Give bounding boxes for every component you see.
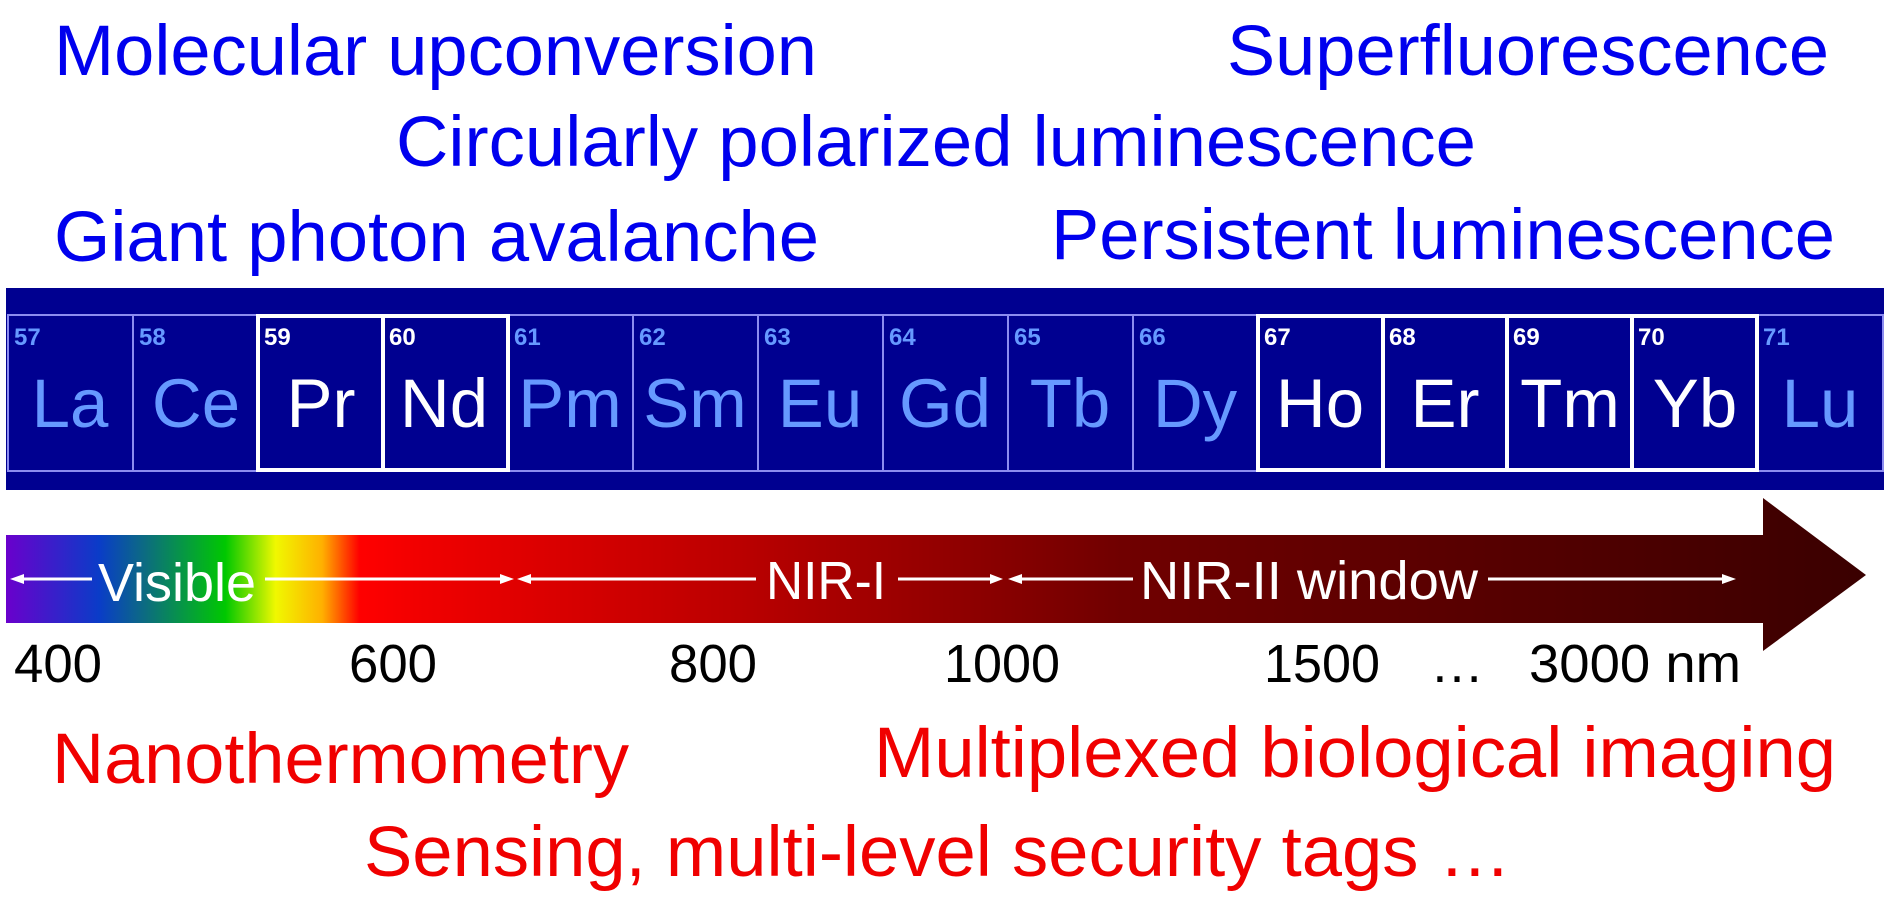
heading: Giant photon avalanche: Giant photon avalanche [54, 198, 819, 277]
element: Nd: 60 [389, 324, 416, 351]
element: Lu: 71 [1763, 324, 1790, 351]
label: Visible: Visible [98, 553, 256, 613]
element: Pr: Pr [286, 365, 356, 442]
tick: 3000 nm: 3000 nm [1529, 634, 1741, 694]
label: NIR-I: NIR-I [766, 551, 886, 611]
element: Yb: Yb [1653, 365, 1737, 442]
element: Tb: Tb [1030, 365, 1110, 442]
axis labels [14, 634, 1741, 694]
element: Er [1389, 324, 1480, 442]
element: Tm: 69 [1513, 324, 1540, 351]
element: Gd: 64 [889, 324, 916, 351]
element: Yb: 70 [1638, 324, 1665, 351]
element: Tm [1513, 324, 1620, 442]
element: Sm: 62 [639, 324, 666, 351]
element: Ho: Ho [1276, 365, 1364, 442]
highlighted cells: Ho, Er, Tm, Yb [1258, 316, 1757, 470]
element: Sm: Sm [643, 365, 747, 442]
element: Yb [1638, 324, 1737, 442]
element: Eu [764, 324, 862, 442]
element: Tm: Tm [1520, 365, 1620, 442]
element: Dy [1139, 324, 1238, 442]
arrow: NIR-II left [1008, 574, 1133, 584]
element: Ho: 67 [1264, 324, 1291, 351]
element: La [14, 324, 109, 442]
tick: 1500: 1500 [1264, 634, 1380, 694]
arrow: visible left [10, 574, 92, 584]
element: Er: 68 [1389, 324, 1416, 351]
element: Lu [1763, 324, 1858, 442]
label: NIR-II window: NIR-II window [1140, 551, 1479, 611]
element: La: La [32, 365, 109, 442]
element: Ce: 58 [139, 324, 166, 351]
element: Pm [514, 324, 622, 442]
element: Eu: 63 [764, 324, 791, 351]
element: Dy: 66 [1139, 324, 1166, 351]
element: Tb [1014, 324, 1110, 442]
element: Gd: Gd [899, 365, 991, 442]
heading: Multiplexed biological imaging: Multiplexed biological imaging [874, 714, 1836, 793]
tick: 600: 600 [349, 634, 437, 694]
arrow: NIR-I left [517, 574, 756, 584]
tick: 400: 400 [14, 634, 102, 694]
element: Pr [264, 324, 356, 442]
element: Pm: Pm [518, 365, 622, 442]
ellipsis: … [1430, 634, 1484, 694]
element: Dy: Dy [1153, 365, 1238, 442]
arrow: NIR-I right [898, 574, 1003, 584]
element: Er: Er [1410, 365, 1480, 442]
element: Nd [389, 324, 488, 442]
element: Sm [639, 324, 747, 442]
element: Ce: Ce [152, 365, 240, 442]
heading: Nanothermometry: Nanothermometry [52, 720, 629, 799]
heading: Persistent luminescence: Persistent luminescence [1051, 196, 1835, 275]
highlighted cells: Pr, Nd [258, 316, 508, 470]
heading: Superfluorescence: Superfluorescence [1227, 12, 1829, 91]
heading: Molecular upconversion: Molecular upconversion [54, 12, 817, 91]
element: Gd [889, 324, 991, 442]
element: Lu: Lu [1782, 365, 1858, 442]
element: Pr: 59 [264, 324, 291, 351]
element: Nd: Nd [400, 365, 488, 442]
range arrows and labels [10, 551, 1736, 613]
heading: Sensing, multi-level security tags: Sensing, multi-level security tags … [364, 813, 1511, 892]
element: Ho [1264, 324, 1364, 442]
element: Eu: Eu [778, 365, 862, 442]
arrow: visible right [265, 574, 514, 584]
tick: 800: 800 [669, 634, 757, 694]
element: Pm: 61 [514, 324, 541, 351]
arrow: wavelength spectrum [6, 498, 1866, 651]
panel: lanthanide periodic table row [6, 288, 1884, 490]
element: Ce [139, 324, 240, 442]
arrow: NIR-II right [1488, 574, 1736, 584]
heading: Circularly polarized luminescence: Circularly polarized luminescence [396, 103, 1476, 182]
element: Tb: 65 [1014, 324, 1041, 351]
element: La: 57 [14, 324, 41, 351]
tick: 1000: 1000 [944, 634, 1060, 694]
